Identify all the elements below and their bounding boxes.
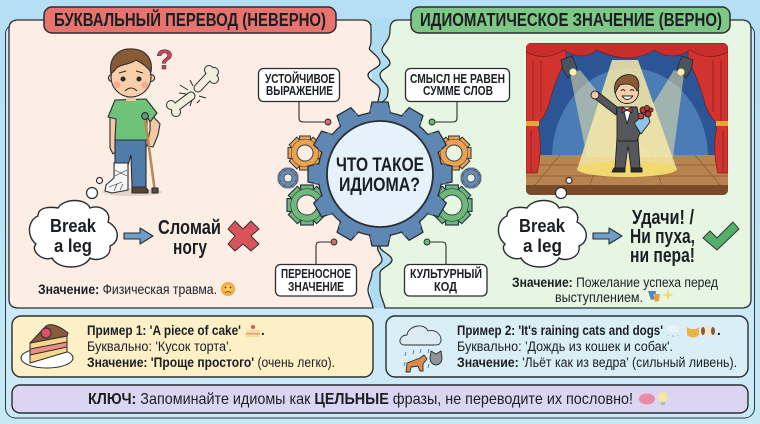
stream between panels xyxy=(370,18,392,308)
performer xyxy=(591,75,653,172)
example 1 text xyxy=(87,323,335,370)
cloud: break a leg xyxy=(498,200,586,267)
callout: figurative meaning xyxy=(276,239,356,296)
callout: meaning is not sum of words: СМЫСЛ НЕ РАВЕН xyxy=(410,71,505,86)
callout: meaning is not sum of words xyxy=(406,68,510,125)
emoji: masks and sparkles xyxy=(648,289,674,302)
callout: stable expression xyxy=(258,68,340,125)
example 1 text: Значение: 'Проще простого' (очень легко). xyxy=(87,355,335,370)
icon: cake xyxy=(21,325,73,368)
cloud: break a leg xyxy=(29,200,117,267)
callout: cultural code xyxy=(404,239,487,296)
curtains xyxy=(526,43,728,173)
icon: question mark: ? xyxy=(156,44,173,75)
panel: literal translation xyxy=(9,7,382,308)
panel: example 2 xyxy=(386,316,748,377)
callout: stable expression: УСТОЙЧИВОЕ xyxy=(265,71,335,86)
icon: broken bone xyxy=(166,66,218,116)
example 2 text: Пример 2: 'It's raining cats and dogs' xyxy=(457,323,663,338)
panel: example 1 xyxy=(12,316,373,377)
example 2 text xyxy=(457,323,737,370)
arrow xyxy=(593,228,622,244)
central gears xyxy=(278,102,481,246)
literal result text: ногу xyxy=(173,237,208,259)
emoji: brain and bulb xyxy=(639,392,668,405)
icon: red cross xyxy=(228,221,259,251)
idiomatic result text: ни пера! xyxy=(630,245,695,267)
small gears xyxy=(278,136,481,225)
callout: figurative meaning: ПЕРЕНОСНОЕ xyxy=(281,266,351,281)
meaning: idiomatic: Значение: Пожелание успеха перед xyxy=(512,275,718,290)
cloud: break a leg: Break xyxy=(50,216,97,236)
panel: idiomatic meaning xyxy=(380,7,751,308)
meaning: idiomatic: выступлением. xyxy=(555,290,643,305)
cloud: break a leg: a leg xyxy=(523,236,562,256)
key takeaway bar: КЛЮЧ: Запоминайте идиомы как ЦЕЛЬНЫЕ фразы, не переводите их пословно! xyxy=(88,391,633,408)
example 1 text: Буквально: 'Кусок торта'. xyxy=(87,339,232,354)
idiomatic result text: Ни пуха, xyxy=(630,226,695,248)
key takeaway bar xyxy=(12,385,748,413)
callout: cultural code: КОД xyxy=(434,279,458,294)
literal result text: Сломай xyxy=(158,217,221,239)
callout: meaning is not sum of words: СУММЕ СЛОВ xyxy=(423,83,493,98)
gear title: ЧТО ТАКОЕ xyxy=(336,154,424,176)
thought bubbles xyxy=(86,178,102,198)
gear title: ИДИОМА? xyxy=(339,174,420,196)
callout: figurative meaning: ЗНАЧЕНИЕ xyxy=(288,279,344,294)
heading: literal: БУКВАЛЬНЫЙ ПЕРЕВОД (НЕВЕРНО) xyxy=(54,9,326,30)
illustration: theatre stage xyxy=(526,43,728,195)
icon: rain, cat and dog xyxy=(400,326,442,372)
thought bubbles xyxy=(556,178,572,198)
callout: stable expression: ВЫРАЖЕНИЕ xyxy=(266,83,333,98)
cloud: break a leg: Break xyxy=(519,216,566,236)
meaning: idiomatic xyxy=(512,275,718,305)
heading: literal xyxy=(44,7,336,33)
example 2 text: Буквально: 'Дождь из кошек и собак'. xyxy=(457,339,673,354)
emoji: rain, cat, dog xyxy=(667,325,715,338)
emoji: sad face xyxy=(221,282,235,296)
example 2 text: Значение: 'Льёт как из ведра' (сильный ливень). xyxy=(457,355,737,370)
idiomatic result text xyxy=(630,207,695,267)
callout: cultural code: КУЛЬТУРНЫЙ xyxy=(410,266,482,281)
gear title xyxy=(336,154,424,196)
spotlight beams xyxy=(570,60,684,170)
arrow xyxy=(124,228,153,244)
literal result text xyxy=(158,217,221,259)
idiomatic result text: Удачи! / xyxy=(632,207,694,229)
spot lamps xyxy=(561,56,693,78)
cloud: break a leg: a leg xyxy=(54,236,92,256)
icon: green check xyxy=(703,222,739,250)
example 2 text: . xyxy=(717,323,721,338)
main gear xyxy=(308,102,452,246)
emoji: cake xyxy=(246,325,260,337)
meaning: literal: Значение: Физическая травма. xyxy=(38,282,217,297)
example 1 text: . xyxy=(261,323,265,338)
illustration: injured boy xyxy=(102,49,162,196)
heading: idiomatic xyxy=(411,7,730,33)
example 1 text: Пример 1: 'A piece of cake' xyxy=(87,323,241,338)
